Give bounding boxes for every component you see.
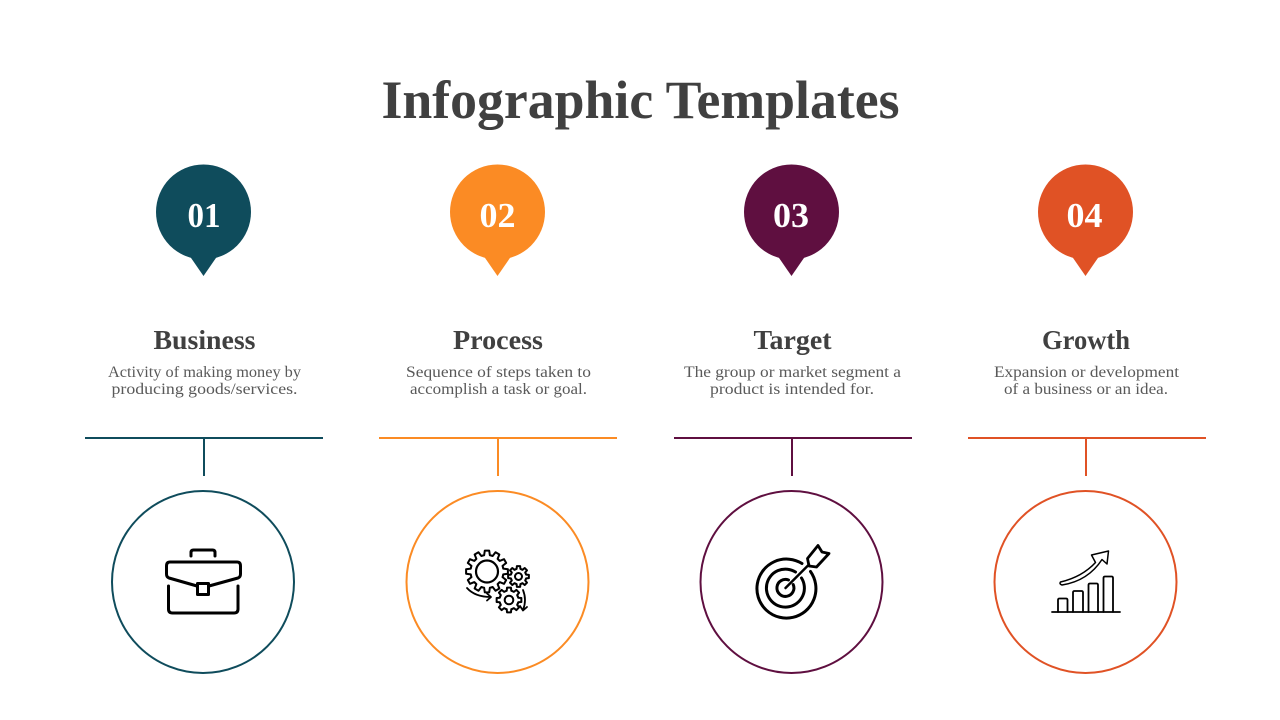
pin: 04 — [1038, 164, 1133, 276]
description: target: The group or market segment a — [684, 364, 901, 381]
icon circle: process — [406, 491, 588, 673]
pin: 02: 02 — [480, 196, 516, 235]
description: target: product is intended for. — [710, 381, 874, 398]
heading: process: Process — [453, 325, 543, 355]
icon circle: business — [112, 491, 294, 673]
connector: target — [674, 438, 912, 476]
description: process — [406, 364, 591, 398]
pin: 01: 01 — [188, 196, 220, 235]
panel: process — [379, 164, 617, 673]
description: business — [108, 364, 301, 398]
description: business: producing goods/services. — [112, 381, 298, 398]
icon circle: target — [700, 491, 882, 673]
panel: business — [85, 164, 323, 673]
description: business: Activity of making money by — [108, 364, 301, 381]
description: process: accomplish a task or goal. — [410, 381, 587, 398]
description: growth: Expansion or development — [994, 364, 1180, 381]
icon: briefcase — [166, 550, 240, 613]
pin: 02 — [450, 164, 545, 276]
description: growth — [994, 364, 1180, 398]
panel: growth — [968, 164, 1206, 673]
heading: business: Business — [154, 325, 256, 355]
icon: growth chart — [1052, 551, 1120, 612]
pin: 04: 04 — [1066, 196, 1102, 235]
icon: gears — [466, 551, 529, 612]
connector: business — [85, 438, 323, 476]
heading: target: Target — [754, 325, 832, 355]
description: process: Sequence of steps taken to — [406, 364, 591, 381]
title: Infographic Templates — [382, 70, 900, 130]
pin: 01 — [156, 164, 251, 276]
connector: process — [379, 438, 617, 476]
connector: growth — [968, 438, 1206, 476]
description: target — [684, 364, 901, 398]
icon: target with arrow — [757, 546, 829, 618]
heading: growth: Growth — [1042, 325, 1130, 355]
icon circle: growth — [994, 491, 1176, 673]
pin: 03 — [744, 164, 839, 276]
pin: 03: 03 — [773, 196, 809, 235]
description: growth: of a business or an idea. — [1004, 381, 1168, 398]
panel: target — [674, 164, 912, 673]
